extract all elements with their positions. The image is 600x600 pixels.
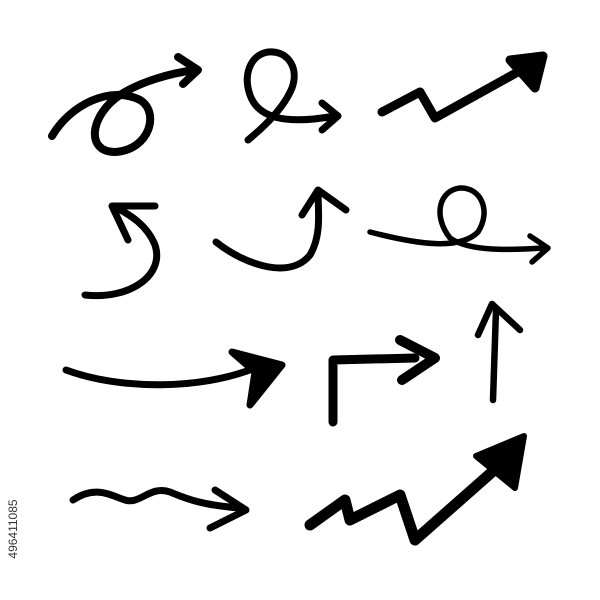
arrow: L-shaped — [333, 340, 435, 422]
arrow: right loop — [370, 188, 548, 262]
arrow: bottom-right zigzag — [310, 436, 524, 540]
arrow: curved upward — [216, 190, 346, 268]
arrow: top-middle loop — [247, 52, 338, 140]
arrow: curved back-left — [85, 206, 157, 296]
arrow: wavy — [73, 490, 246, 528]
arrow: vertical up — [478, 304, 520, 400]
arrow: top-right zigzag — [382, 56, 543, 118]
arrow: top-left loop — [52, 57, 198, 152]
side id text: 496411085 — [6, 499, 20, 559]
arrow: long swoosh — [66, 352, 282, 405]
